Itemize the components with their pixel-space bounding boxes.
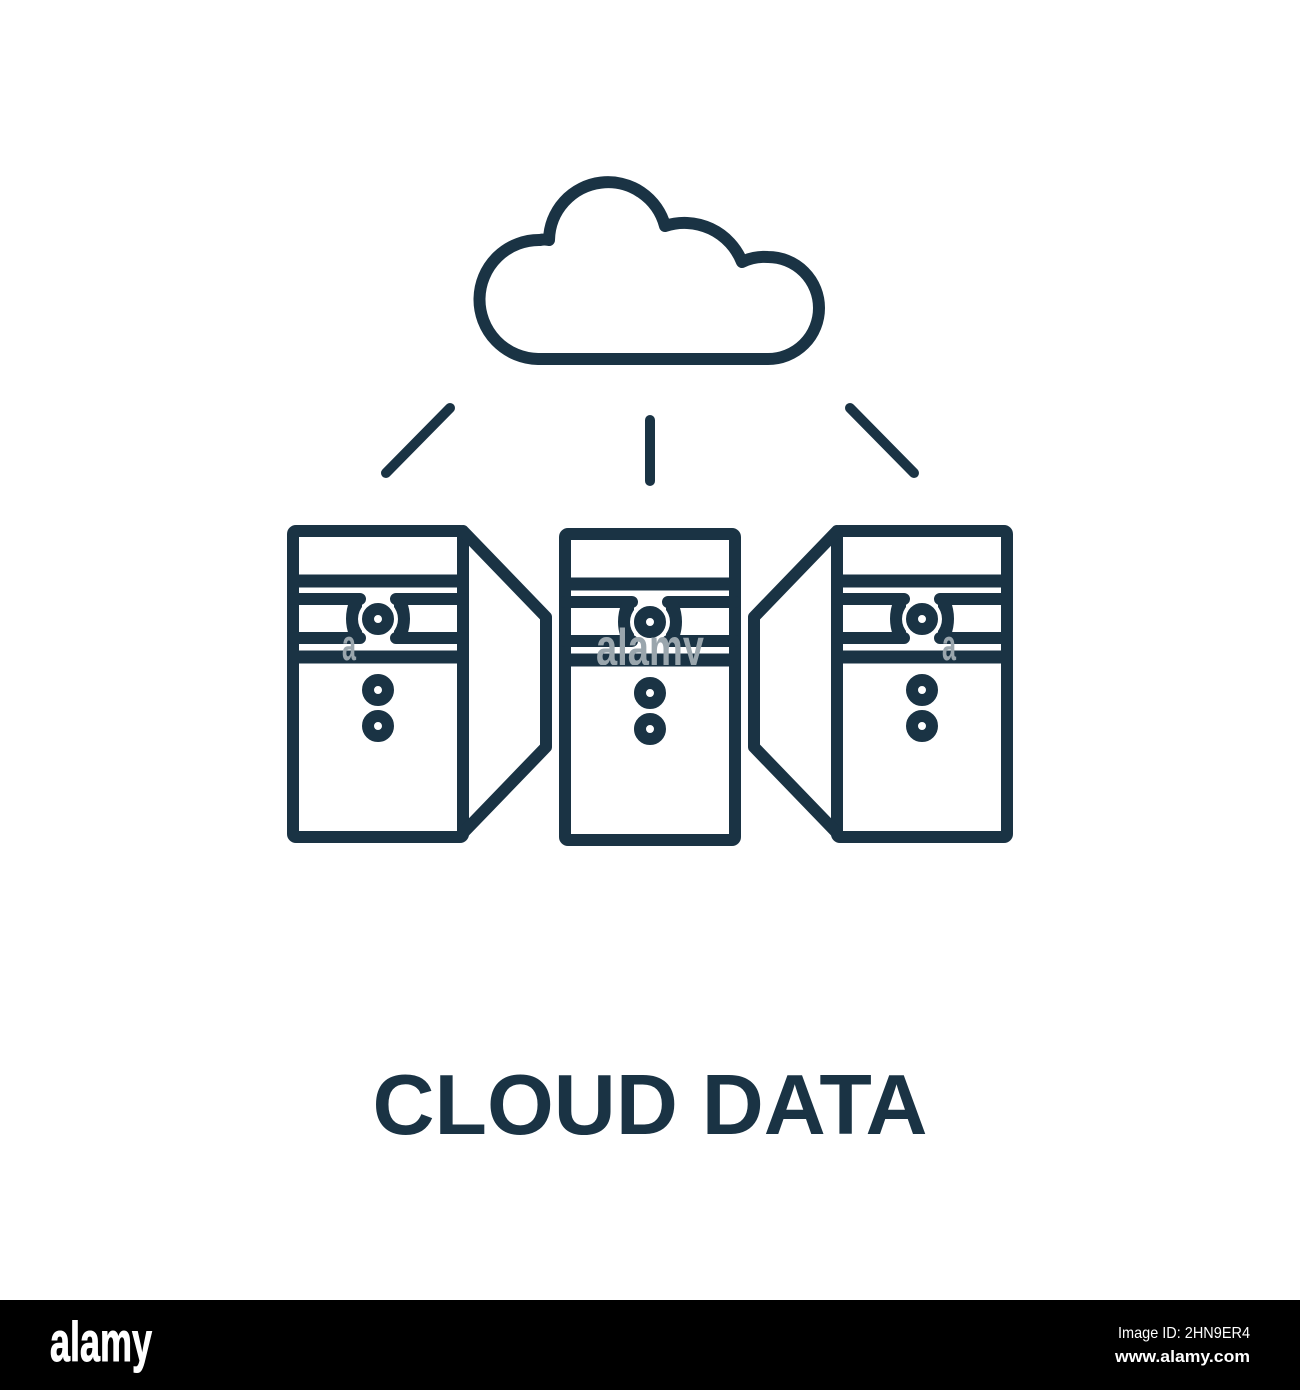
connector: left — [386, 408, 450, 473]
connector: right — [850, 408, 914, 473]
image id: Image ID: 2HN9ER4 — [1118, 1325, 1250, 1342]
icon: left server — [293, 531, 546, 837]
connector: centre — [645, 420, 655, 481]
icon: centre server — [565, 534, 735, 840]
watermark: alamy — [596, 619, 704, 677]
footer bar — [0, 1300, 1300, 1390]
icon: cloud — [479, 182, 819, 359]
watermark: a — [942, 621, 956, 670]
website: www.alamy.com — [1114, 1347, 1250, 1366]
icon: right server — [754, 531, 1007, 837]
watermark: a — [342, 621, 356, 670]
footer logo: alamy — [50, 1310, 152, 1373]
title: CLOUD DATA — [372, 1058, 928, 1153]
watermark — [342, 628, 956, 665]
